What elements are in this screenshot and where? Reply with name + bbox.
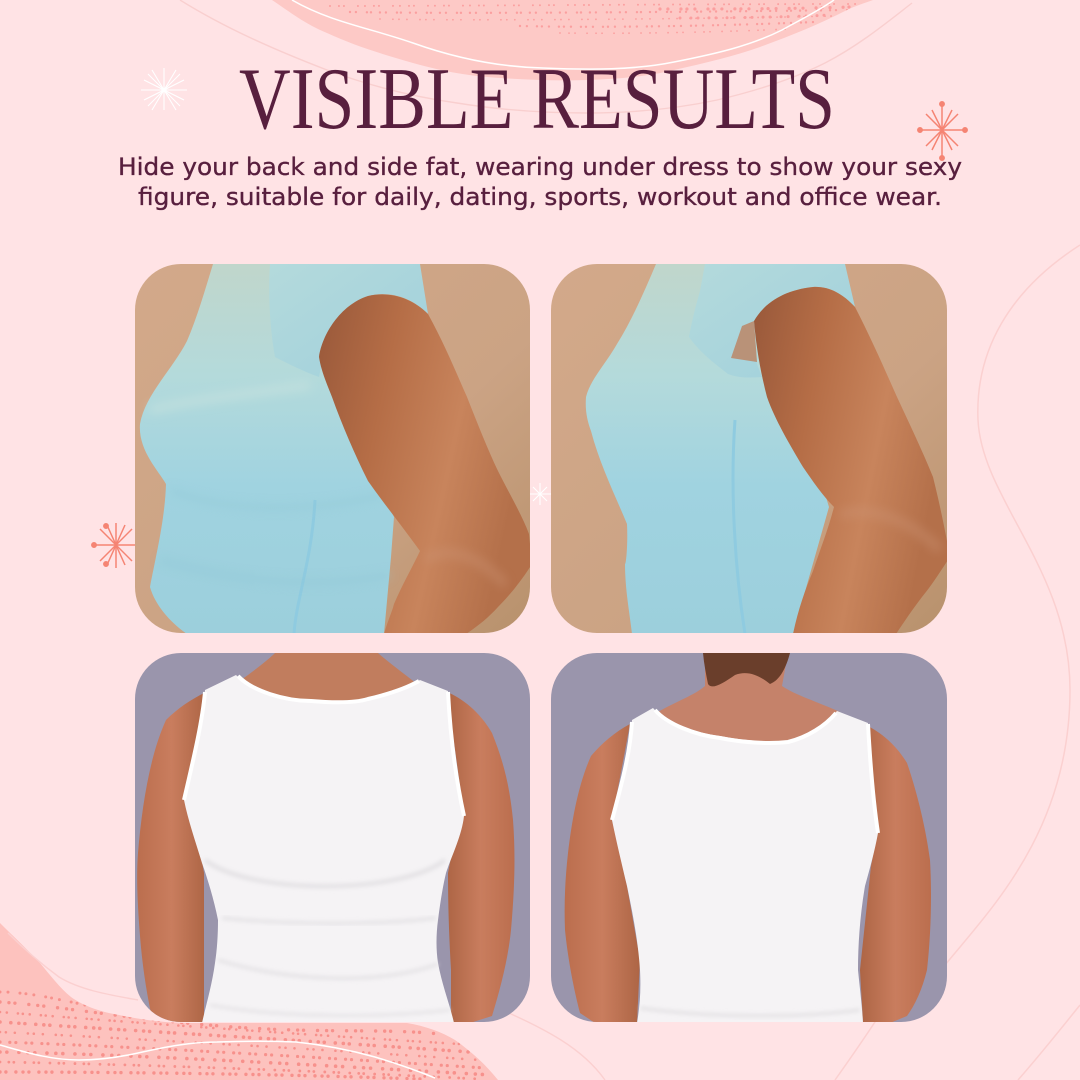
shirt wrinkles xyxy=(205,860,450,1015)
shirt folds and seam xyxy=(150,385,390,634)
subtitle: Hide your back and side fat, wearing under dress to show your sexy xyxy=(118,153,962,181)
tank top xyxy=(612,708,878,1023)
right arm xyxy=(447,692,514,1023)
icon: coral starburst top right xyxy=(918,102,967,160)
top decorative blob xyxy=(180,0,912,113)
right decorative curves xyxy=(835,245,1080,1080)
hair xyxy=(703,653,790,686)
title: VISIBLE RESULTS xyxy=(239,51,835,148)
icon: coral starburst left xyxy=(92,523,140,568)
shirt folds and seam xyxy=(733,420,745,634)
icon: small white sparkle between photos xyxy=(530,483,551,505)
icon: white starburst top left xyxy=(141,68,187,110)
subtitle xyxy=(118,153,962,211)
subtitle: figure, suitable for daily, dating, sports, workout and office wear. xyxy=(138,183,942,211)
photo: side view after xyxy=(551,264,950,634)
sleeve xyxy=(269,264,428,377)
armhole gap xyxy=(731,321,757,362)
sleeve xyxy=(689,264,855,378)
bottom-left decorative blob xyxy=(0,923,605,1080)
photo: back view after xyxy=(551,653,947,1023)
neck xyxy=(659,666,840,741)
left arm xyxy=(137,692,206,1023)
left arm xyxy=(565,724,640,1023)
arm xyxy=(754,287,950,634)
neck xyxy=(244,653,414,700)
arm xyxy=(319,294,532,634)
tank top xyxy=(184,675,464,1023)
photo: back view before xyxy=(135,653,530,1023)
photo: side view before xyxy=(135,264,532,634)
right arm xyxy=(860,726,931,1023)
